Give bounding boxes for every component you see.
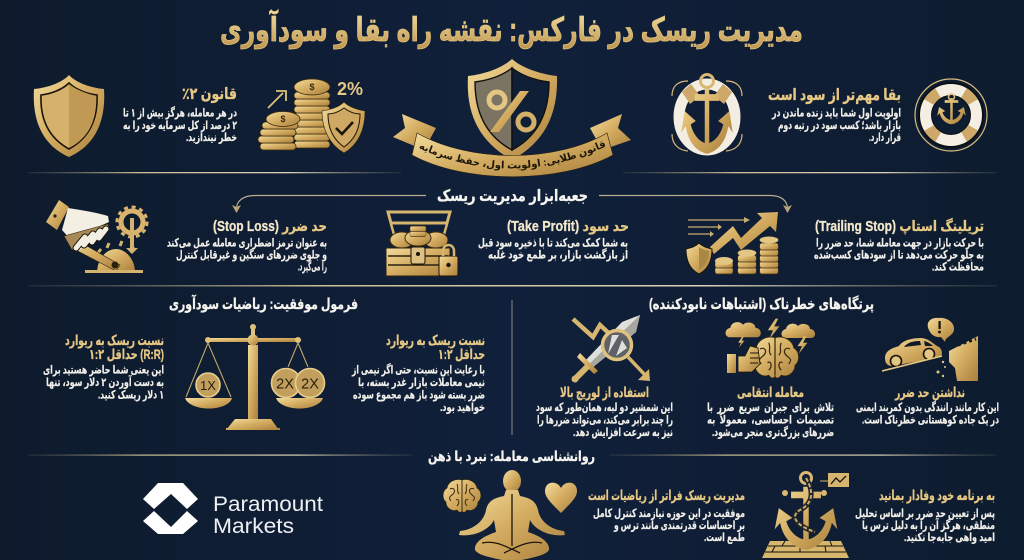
- text: take profit description: [478, 238, 628, 262]
- heading: risk reward minimum: حداقل ۱:۲: [438, 346, 485, 362]
- text: high leverage description: را چند برابر می‌کند، می‌تواند ضررها را: [537, 414, 673, 428]
- panel: risk reward ratio: [43, 332, 164, 402]
- panel: beyond math: [588, 488, 745, 544]
- icon: rising arrow with coins: [686, 212, 778, 274]
- panel: high leverage: [536, 385, 673, 439]
- panel: no stop loss: [856, 385, 999, 428]
- text: beyond math description: موفقیت در این حوزه نیازمند کنترل کامل: [593, 508, 745, 521]
- text: stop loss description: و جلوی ضررهای سنگین و غیرقابل کنترل: [176, 248, 327, 262]
- heading: 2 percent rule: قانون ۲٪: [182, 86, 237, 103]
- text: survival description: اولویت اول شما باید زنده ماندن در: [771, 108, 901, 120]
- text: risk reward minimum description: نیمی معاملات بازار غدر بسته، با: [358, 377, 485, 389]
- icon: brain, fist and storm clouds: [726, 319, 815, 378]
- text: stop loss description: [167, 238, 327, 274]
- heading: trailing stop: تریلینگ استاپ (Trailing Stop): [815, 217, 984, 235]
- text: risk reward ratio description: [43, 364, 164, 402]
- heading: risk reward ratio: (R:R) حداقل ۱:۲: [89, 346, 164, 362]
- text: revenge trading description: ضررهای بزرگ‌تری منجر می‌شود.: [712, 425, 834, 440]
- panel: trailing stop: [814, 217, 984, 274]
- section heading: risk toolbox: جعبه‌ابزار مدیریت ریسک: [437, 188, 588, 205]
- text: high leverage description: [536, 402, 673, 439]
- icon: coins and shield 2%: $: [280, 114, 286, 124]
- icon: central shield with percent: [468, 59, 557, 160]
- text: survival description: [771, 108, 901, 144]
- icon: balance scale: [185, 324, 324, 430]
- arrow: toolbox right: [599, 196, 792, 213]
- text: stay loyal description: [855, 508, 995, 545]
- text: survival description: بازار باشد؛ کسب سود در رتبه دوم: [778, 120, 901, 133]
- heading: revenge trading: معامله انتقامی: [737, 385, 804, 400]
- heading: survival: بقا مهم‌تر از سود است: [768, 87, 901, 104]
- logo: Paramount Markets: [143, 483, 323, 538]
- text: survival description: قرار دارد.: [869, 132, 901, 144]
- text: 2 percent rule description: خطر نیندازید.: [186, 132, 237, 144]
- icon: sword, magnifier and falling arrow: [572, 315, 650, 382]
- icon: lifebuoy with anchor: [915, 79, 987, 151]
- text: beyond math description: [593, 508, 745, 544]
- heading: no stop loss: نداشتن حد ضرر: [894, 385, 965, 400]
- text: trailing stop description: [814, 238, 984, 274]
- icon: coins and shield 2%: [258, 79, 365, 153]
- text: risk reward minimum description: ضرر بسته شود باز هم مجموع سوده: [353, 390, 485, 402]
- section heading: dangerous pitfalls: پرتگاه‌های خطرناک (اشتباهات نابودکننده): [649, 295, 874, 314]
- text: take profit description: به شما کمک می‌کند تا با ذخیره سود قبل: [478, 238, 628, 250]
- logo: Paramount Markets: Paramount: [213, 493, 323, 516]
- heading: beyond math: مدیریت ریسک فراتر از ریاضیات است: [588, 488, 745, 503]
- heading: risk reward minimum: نسبت ریسک به ریوارد: [386, 332, 485, 349]
- icon: anchor with chain on bricks: [762, 472, 849, 558]
- heading: take profit: حد سود (Take Profit): [507, 219, 629, 235]
- section heading: trading psychology: روانشناسی معامله: نبرد با ذهن: [428, 448, 595, 465]
- icon: treasure chest with lock: [386, 212, 458, 276]
- icon: balance scale: 1X: [200, 378, 216, 393]
- icon: car at cliff edge: [882, 318, 978, 381]
- text: take profit description: از بازگشت بازار، بر طمع خود غلبه: [488, 248, 628, 262]
- icon: balance scale: 2X: [276, 376, 294, 392]
- text: 2 percent rule description: [123, 106, 237, 144]
- icon: large anchor in lifebuoy: [672, 74, 742, 154]
- heading: high leverage: استفاده از لوریج بالا: [560, 385, 649, 400]
- text: 2 percent rule description: در هر معامله، هرگز بیش از ۱ تا: [123, 106, 237, 120]
- text: no stop loss description: [856, 400, 999, 428]
- text: را می‌گیرد.: [298, 260, 327, 274]
- panel: stop loss: [167, 219, 327, 274]
- section heading: success formula: فرمول موفقیت: ریاضیات سودآوری: [169, 295, 358, 313]
- text: risk reward minimum description: با رعایت این نسبت، حتی اگر نیمی از: [351, 362, 485, 376]
- text: high leverage description: این شمشیر دو لبه، همان‌طور که سود: [536, 402, 673, 415]
- text: risk reward ratio description: این یعنی شما حاضر هستید برای: [43, 364, 164, 376]
- text: revenge trading description: تلاش برای جبران سریع ضرر با: [707, 402, 834, 414]
- text: risk reward ratio description: به دست آوردن ۲ دلار سود، تنها: [46, 375, 164, 390]
- panel: stay loyal: [855, 488, 995, 545]
- heading: risk reward minimum: [386, 332, 485, 362]
- logo: Paramount Markets: Markets: [213, 515, 294, 538]
- heading: risk reward ratio: نسبت ریسک به ریوارد: [65, 332, 164, 349]
- panel: revenge trading: [707, 385, 834, 440]
- title: مدیریت ریسک در فارکس: نقشه راه بقا و سودآوری: [220, 9, 803, 50]
- icon: coins and shield 2%: 2%: [337, 79, 363, 99]
- panel: risk reward minimum: [351, 332, 485, 415]
- heading: stop loss: حد ضرر (Stop Loss): [213, 219, 327, 235]
- heading: risk reward ratio: [65, 332, 164, 362]
- icon: coins and shield 2%: $: [309, 82, 315, 92]
- ribbon: golden rule: [393, 114, 631, 177]
- text: stop loss description: به عنوان ترمز اضطراری معامله عمل می‌کند: [167, 238, 327, 250]
- text: risk reward ratio description: ۱ دلار ریسک کنید.: [98, 390, 164, 402]
- icon: meditating figure with brain and heart: [443, 470, 577, 560]
- text: high leverage description: نیز به سرعت افزایش دهد.: [573, 427, 673, 439]
- panel: take profit: [478, 219, 629, 262]
- arrow: toolbox left: [232, 196, 426, 213]
- panel: 2 percent rule: [123, 86, 237, 144]
- text: risk reward minimum description: [351, 362, 485, 415]
- icon: hand pulling brake lever: [46, 200, 147, 273]
- icon: gold shield: [34, 75, 104, 157]
- text: beyond math description: طمع است.: [704, 532, 745, 544]
- icon: balance scale: 2X: [301, 376, 319, 392]
- text: revenge trading description: تصمیمات احساسی، معمولاً به: [707, 412, 834, 428]
- ribbon: golden rule: قانون طلایی: اولویت اول، حفظ سرمایه: [420, 141, 605, 171]
- text: risk reward minimum description: خواهید بود.: [440, 402, 485, 415]
- text: beyond math description: بر احساسات قدرتمندی مانند ترس و: [613, 520, 745, 533]
- text: revenge trading description: [707, 402, 834, 440]
- text: 2 percent rule description: ۲ درصد از کل سرمایه خود را به: [123, 120, 237, 133]
- panel: survival over profit: [768, 87, 901, 144]
- text: trailing stop description: محافظت کند.: [932, 262, 984, 274]
